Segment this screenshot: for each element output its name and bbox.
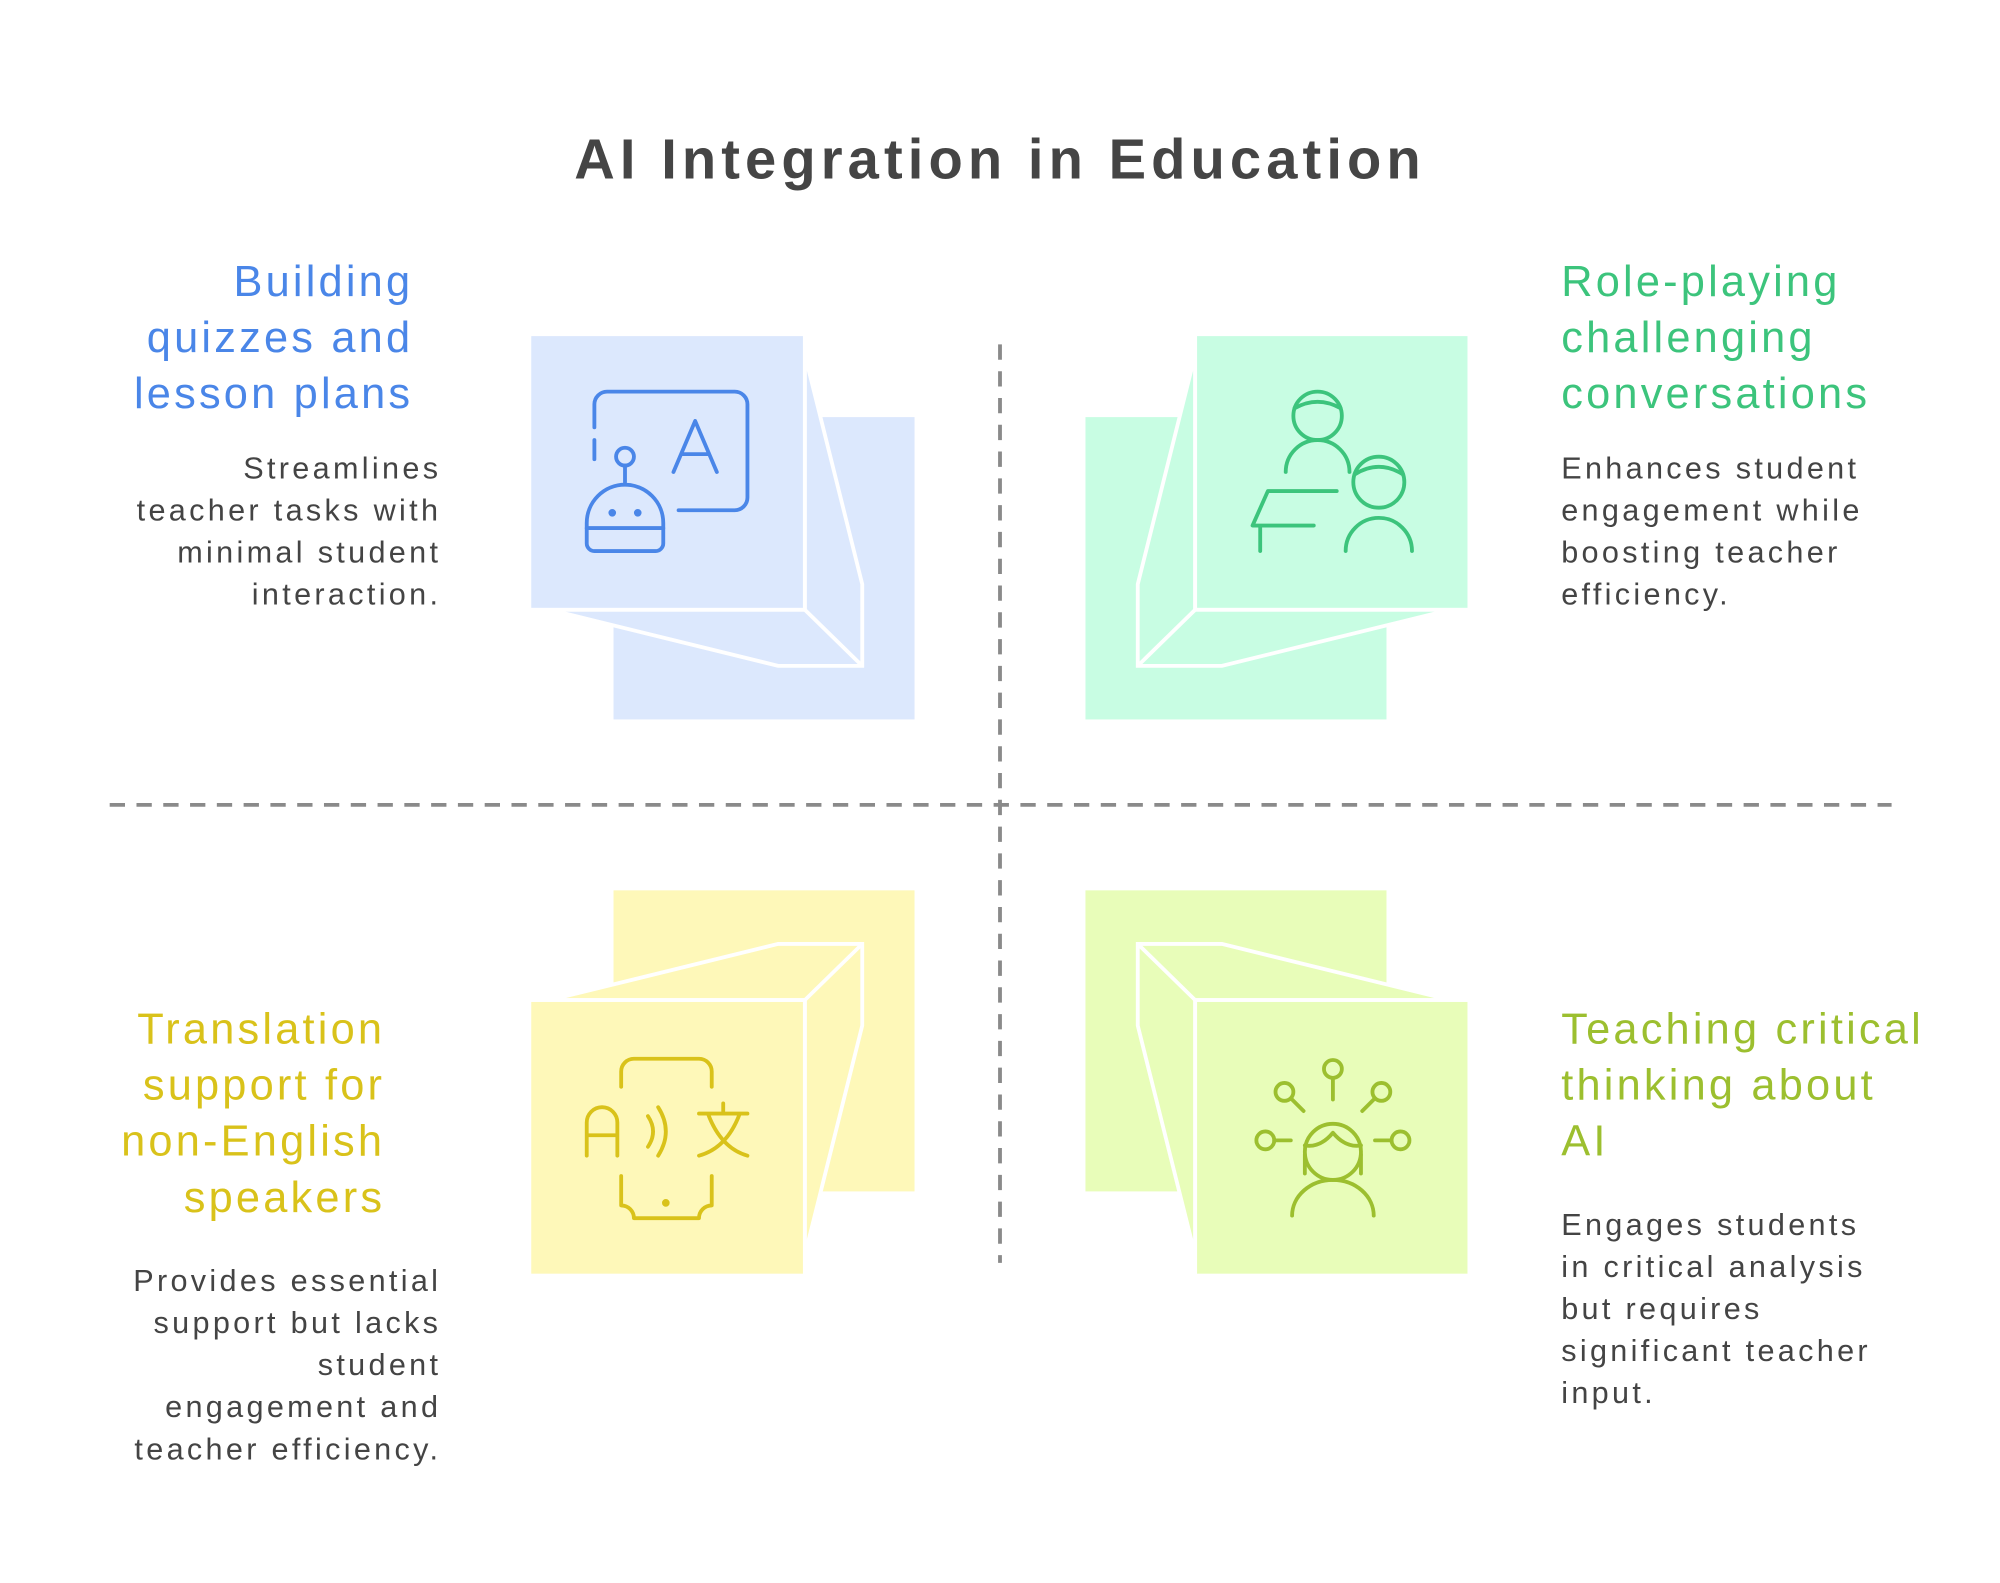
heading: translation: support for — [143, 1062, 385, 1110]
heading: translation: Translation — [137, 1005, 385, 1053]
text: critical thinking description: significant teacher — [1561, 1334, 1871, 1368]
text: quizzes description: interaction. — [252, 578, 441, 612]
text: role-playing description: boosting teacher — [1561, 536, 1841, 570]
heading: role-playing: challenging — [1561, 314, 1816, 362]
text: translation description: student — [318, 1348, 441, 1382]
panel: quizzes cube — [529, 334, 915, 719]
text: role-playing description: Enhances student — [1561, 451, 1859, 485]
heading: quizzes: lesson plans — [134, 370, 413, 418]
heading: critical thinking: Teaching critical — [1561, 1005, 1924, 1053]
heading: role-playing: Role-playing — [1561, 258, 1841, 306]
dashed dividers — [110, 344, 1892, 1263]
heading: critical thinking: AI — [1561, 1118, 1609, 1166]
text: critical thinking description: input. — [1561, 1376, 1656, 1410]
heading: quizzes: quizzes and — [147, 314, 413, 362]
icon: phone translation — [587, 1059, 747, 1218]
text: translation description: Provides essential — [133, 1264, 441, 1298]
text: quizzes description: Streamlines — [243, 451, 441, 485]
text: quizzes description: teacher tasks with — [137, 493, 441, 527]
heading: quizzes: Building — [233, 258, 413, 306]
panel: translation cube — [529, 890, 915, 1276]
icon: two people at desk — [1253, 392, 1412, 551]
text: role-playing description: efficiency. — [1561, 578, 1731, 612]
text: quizzes description: minimal student — [177, 536, 441, 570]
heading: translation: non-English — [121, 1118, 385, 1166]
heading: translation: speakers — [184, 1174, 385, 1222]
text: translation description: support but lacks — [154, 1306, 441, 1340]
title: AI Integration in Education — [574, 128, 1426, 191]
text: translation description: engagement and — [165, 1390, 441, 1424]
text: translation description: teacher efficiency. — [134, 1432, 441, 1466]
text: critical thinking description: Engages students — [1561, 1208, 1859, 1242]
panel: critical thinking cube — [1085, 890, 1469, 1276]
text: critical thinking description: in critical analysis — [1561, 1250, 1866, 1284]
icon: teacher board with robot — [587, 392, 747, 551]
text: critical thinking description: but requires — [1561, 1292, 1763, 1326]
heading: critical thinking: thinking about — [1561, 1062, 1876, 1110]
icon: person thinking with nodes — [1256, 1060, 1409, 1216]
panel: role-playing cube — [1085, 334, 1469, 719]
text: role-playing description: engagement while — [1561, 493, 1863, 527]
heading: role-playing: conversations — [1561, 370, 1870, 418]
